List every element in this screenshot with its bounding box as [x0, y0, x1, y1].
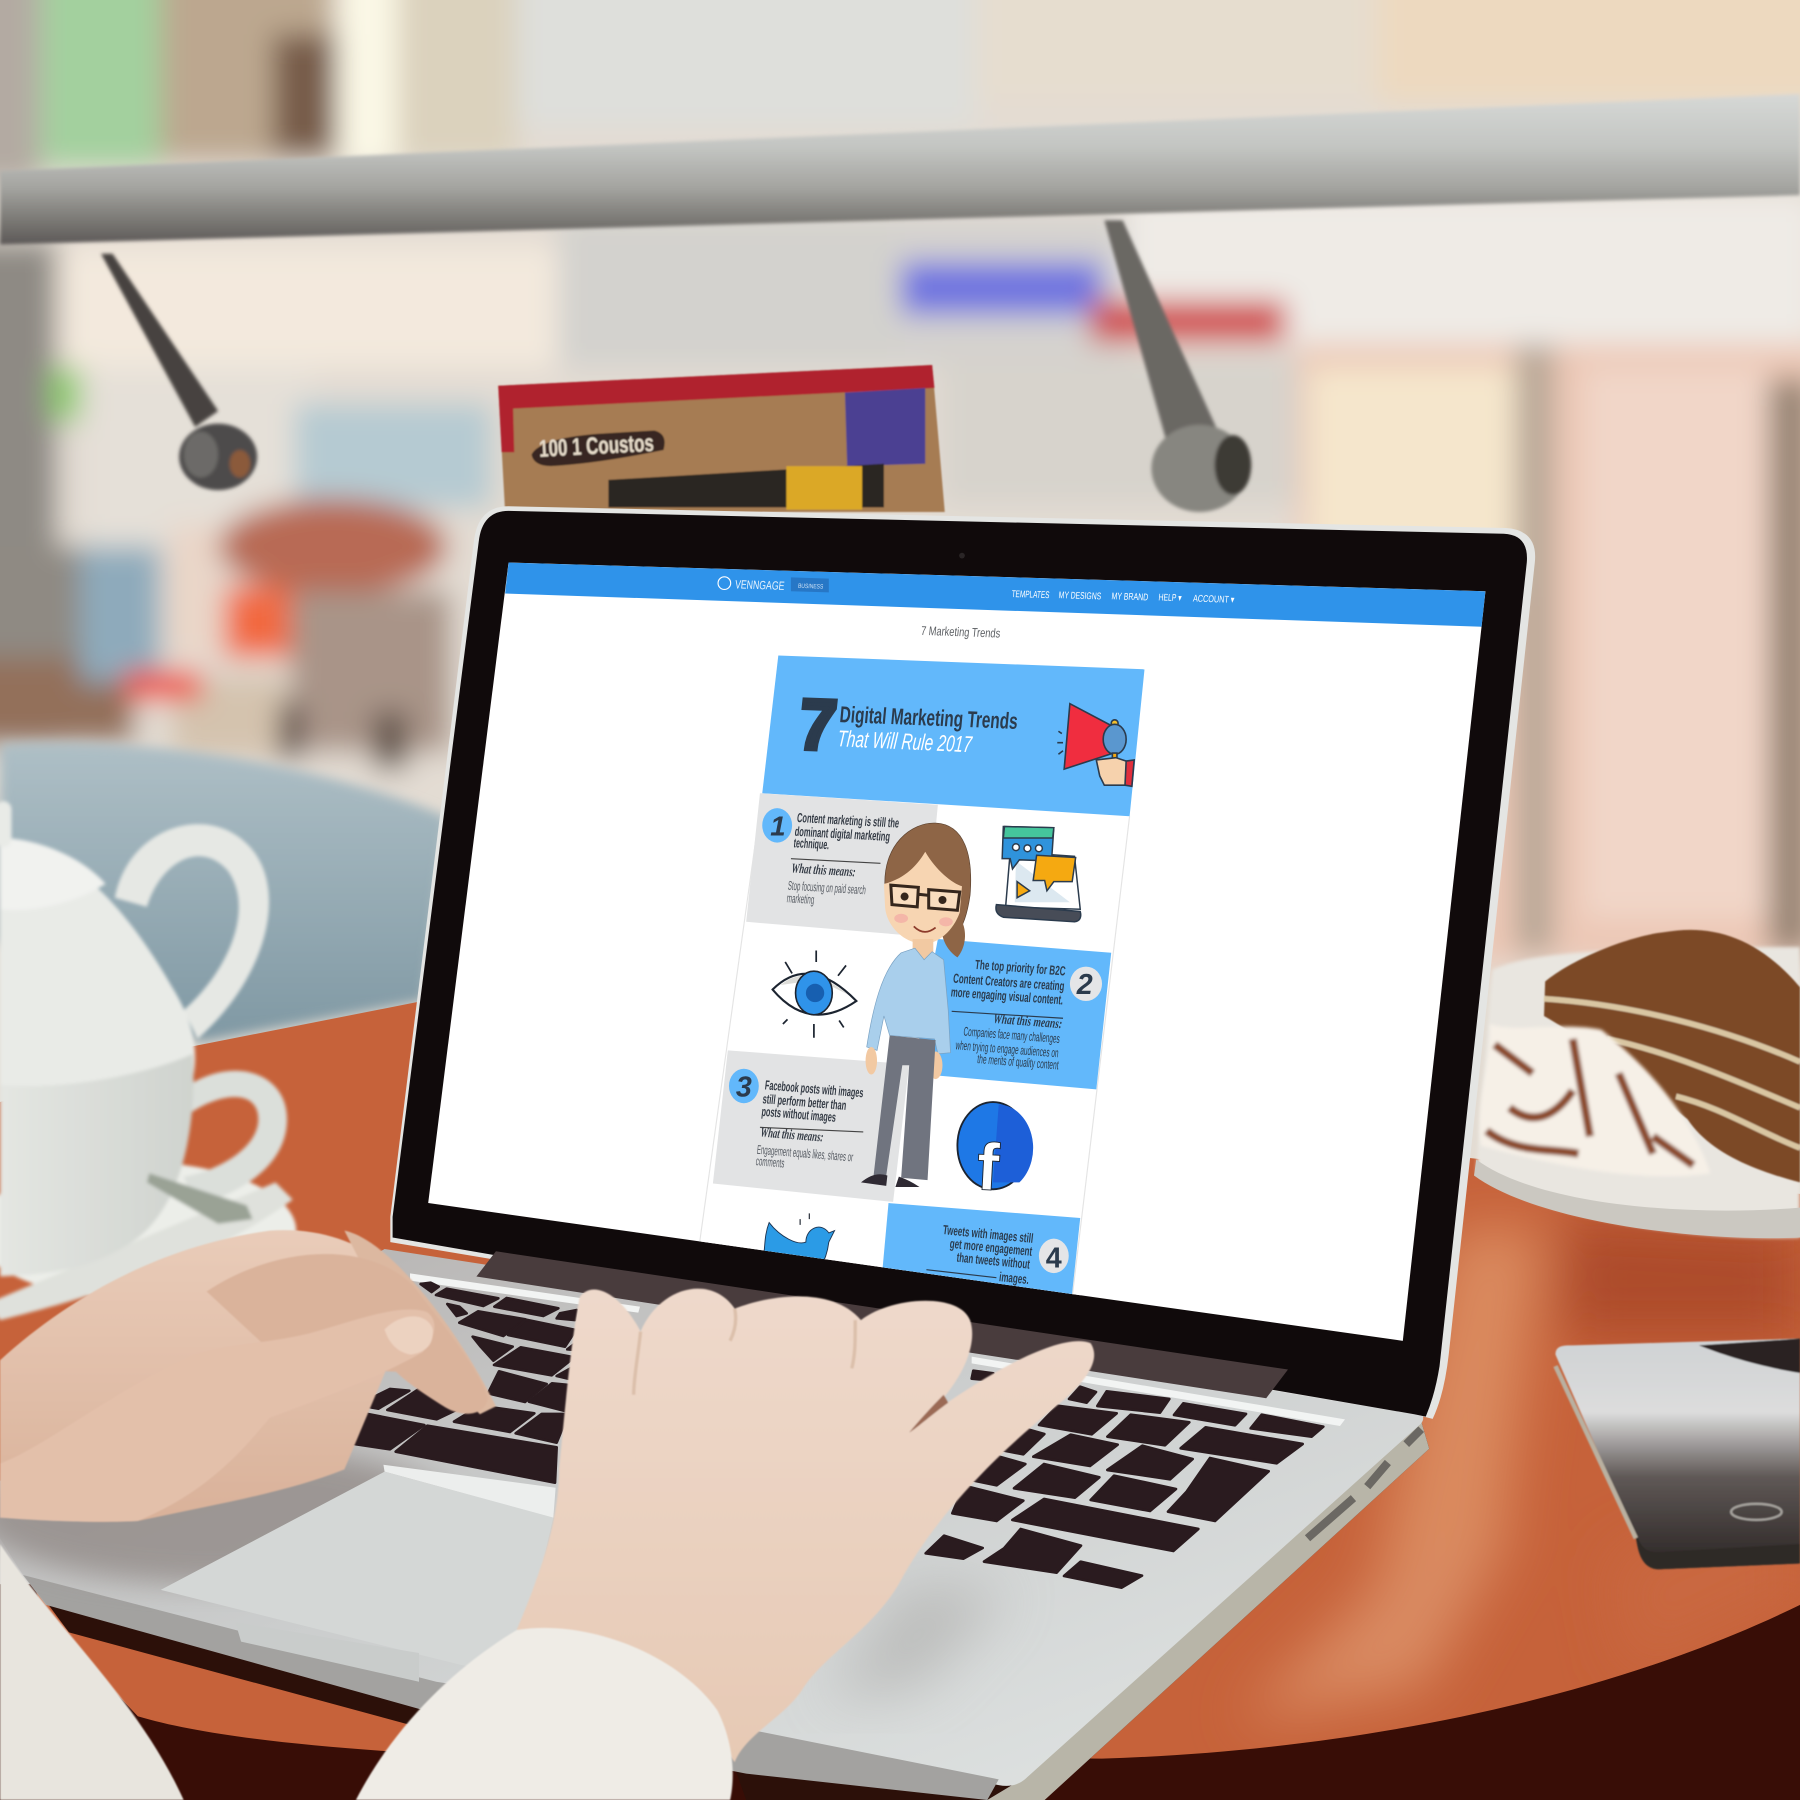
- panel: trend 1: Content marketing is still the: [796, 810, 900, 831]
- sweater sleeves: [0, 1544, 733, 1800]
- blue chair: [0, 742, 448, 1042]
- trackpad: [161, 1472, 553, 1676]
- panel: trend 2: Companies face many challenges: [963, 1025, 1061, 1046]
- panel: trend 3: [713, 1050, 909, 1202]
- rail bracket left: [101, 254, 257, 490]
- panel: trend 1: 1: [770, 811, 786, 842]
- hand right on keyboard: [517, 1289, 1094, 1762]
- thumbnail: [385, 1316, 433, 1355]
- panel: trend 3: 3: [736, 1071, 752, 1103]
- panel: trend 3: still perform better than: [762, 1091, 847, 1113]
- hand left on keyboard: [0, 1230, 496, 1522]
- panel: trend 4: images.: [998, 1269, 1030, 1287]
- web app navigation bar: TEMPLATES: [1011, 589, 1050, 601]
- infographic sheet: [699, 656, 1144, 1296]
- panel: trend 2: 2: [1076, 969, 1093, 1001]
- panel: trend 2: the merits of quality content: [977, 1052, 1060, 1072]
- header title: Digital Marketing Trends: [839, 701, 1019, 734]
- web app navigation bar: BUSINESS: [798, 583, 824, 591]
- page title: 7 Marketing Trends: [920, 624, 1001, 641]
- panel: trend 3: comments: [755, 1154, 785, 1170]
- teapot stacked on cup: [0, 801, 296, 1320]
- icon: eye: [773, 951, 856, 1038]
- panel: trend 4: get more engagement: [949, 1236, 1033, 1259]
- web app navigation bar: ACCOUNT ▾: [1192, 594, 1235, 606]
- panel: trend 4: Tweets with images still: [942, 1222, 1034, 1246]
- side ports: [1308, 1429, 1421, 1538]
- panel: trend 3: posts without images: [761, 1104, 837, 1125]
- index finger: [207, 1254, 488, 1414]
- red cafe menu card: 100 1 Coustos: [538, 430, 654, 463]
- laptop screen: [428, 562, 1485, 1378]
- panel: trend 2: What this means:: [993, 1011, 1063, 1031]
- webcam: [959, 553, 965, 558]
- blurred mall background: [0, 0, 1800, 1217]
- panel: trend 1: marketing: [786, 891, 815, 907]
- panel: trend 1: What this means:: [791, 861, 856, 879]
- panel: trend 1: technique.: [793, 835, 830, 852]
- panel: trend 3: What this means:: [760, 1125, 824, 1145]
- laptop base deck: [0, 1249, 1429, 1800]
- smartphone on table: [1555, 1339, 1800, 1569]
- panel: trend 3: Engagement equals likes, shares or: [756, 1143, 854, 1164]
- red cafe menu card: [498, 365, 945, 512]
- metal hand rail: [0, 94, 1800, 245]
- web app navigation bar: MY BRAND: [1111, 591, 1149, 603]
- front notch: [235, 1622, 419, 1682]
- shadow under left hand: [0, 1446, 459, 1584]
- panel: trend 2: when trying to engage audiences on: [954, 1038, 1059, 1060]
- web app navigation bar: VENNGAGE: [734, 577, 785, 593]
- panel: trend 3: Facebook posts with images: [764, 1077, 864, 1100]
- wooden table: [0, 1001, 1800, 1800]
- rail bracket right: [1104, 220, 1251, 512]
- panel: trend 2: The top priority for B2C: [974, 957, 1067, 979]
- hinge bar: [476, 1251, 1288, 1398]
- shadow right of hand: [827, 1584, 1010, 1699]
- panel: trend 4: 4: [1046, 1242, 1062, 1274]
- icon: megaphone: [1057, 704, 1134, 786]
- web app navigation bar: MY DESIGNS: [1058, 590, 1102, 602]
- panel: trend 1: Stop focusing on paid search: [787, 879, 867, 897]
- panel: trend 1: dominant digital marketing: [794, 824, 891, 844]
- icon: facebook logo: f: [975, 1130, 1002, 1205]
- thumb: [0, 1310, 434, 1522]
- panel: trend 2: [913, 939, 1111, 1089]
- panel: trend 2: more engaging visual content.: [950, 984, 1064, 1007]
- big number 7: 7: [795, 685, 840, 766]
- web app navigation bar: HELP ▾: [1158, 592, 1182, 604]
- keyboard keys, right group: [926, 1357, 1345, 1588]
- panel: trend 4: than tweets without: [956, 1250, 1031, 1272]
- panel: trend 1: [746, 793, 938, 937]
- header band: [762, 655, 1145, 816]
- panel: trend 4: [875, 1203, 1080, 1378]
- icon: twitter bird: [760, 1213, 835, 1286]
- plate with chocolate cake: [1474, 930, 1800, 1238]
- keyboard keys, left group: [250, 1273, 640, 1483]
- web app navigation bar: [505, 562, 1485, 627]
- panel: trend 2: Content Creators are creating: [952, 971, 1065, 994]
- silver strip below space bar: [383, 1465, 556, 1518]
- header subtitle: That Will Rule 2017: [836, 725, 974, 757]
- middle finger: [344, 1231, 496, 1414]
- character: woman with glasses: [861, 823, 971, 1187]
- icon: laptop with chat bubbles: [996, 827, 1081, 922]
- icon: facebook logo: [956, 1101, 1034, 1190]
- laptop lid: [390, 506, 1535, 1419]
